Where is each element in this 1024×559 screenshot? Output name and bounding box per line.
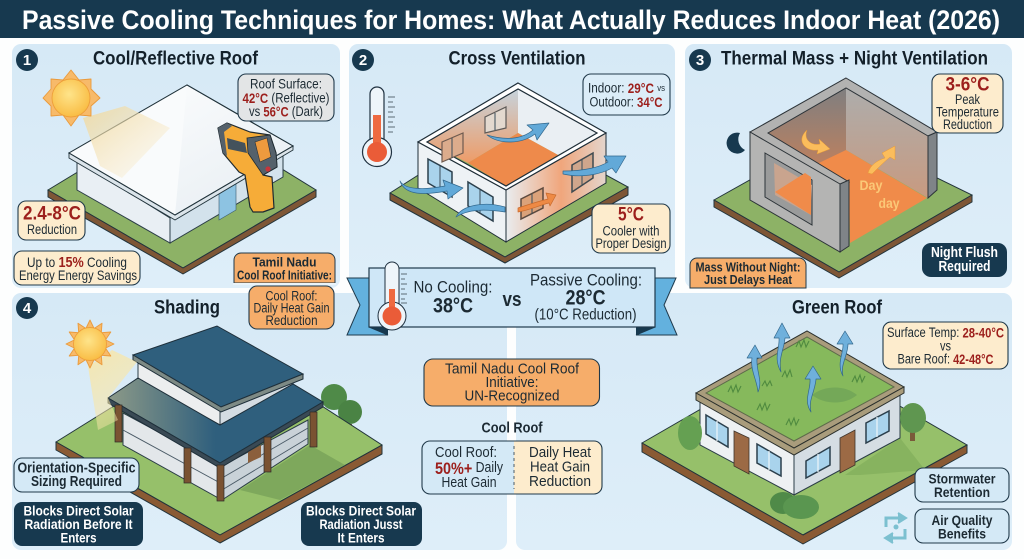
callout: mass without night: Mass Without Night: — [696, 260, 800, 274]
callout: stormwater retention — [915, 468, 1009, 502]
heading: cool roof center: Cool Roof — [482, 420, 543, 436]
heading: cool roof: Cool/Reflective Roof — [93, 48, 259, 70]
callout: blocks direct solar right: It Enters — [338, 530, 385, 546]
callout: 3-6 peak reduction: Temperature — [936, 104, 999, 120]
label: no cooling — [414, 278, 492, 318]
illustration: open room — [390, 83, 628, 263]
panel: shading — [12, 286, 507, 550]
callout: energy savings — [14, 251, 140, 285]
callout: 2.4-8 reduction — [18, 201, 85, 240]
callout: blocks direct solar left — [14, 502, 143, 546]
heading: thermal mass: Thermal Mass + Night Ventilation — [721, 48, 988, 70]
comparison box: cool roof: Heat Gain — [530, 458, 590, 476]
illustration: concrete room — [714, 78, 972, 278]
callout: stormwater retention: Retention — [934, 484, 990, 500]
icon: ribbon thermometer — [378, 262, 407, 330]
number badge 1: 1 — [23, 52, 31, 69]
callout: tamil nadu initiative: Tamil Nadu — [252, 254, 317, 270]
callout: 5 degrees cooler: Cooler with — [602, 224, 660, 238]
panel: cross ventilation — [349, 44, 675, 290]
panel: cool reflective roof — [12, 44, 340, 288]
callout: cool roof daily heat gain: Reduction — [266, 313, 318, 328]
title bar — [0, 0, 1024, 38]
label: day: Day — [860, 177, 883, 193]
comparison ribbon — [347, 262, 677, 335]
number badge 2: 2 — [359, 52, 367, 69]
callout: 3-6 peak reduction — [932, 74, 1003, 133]
icon: sun — [43, 70, 100, 126]
label: no cooling: 38°C — [433, 294, 473, 318]
callout: surface temp: Bare Roof: 42-48°C — [898, 352, 994, 366]
callout: roof surface — [238, 74, 334, 121]
callout: indoor vs outdoor: Outdoor: 34°C — [590, 94, 663, 110]
number badge 3 — [689, 49, 711, 71]
illustration: white roof house — [48, 85, 316, 274]
callout: orientation sizing: Sizing Required — [31, 474, 122, 490]
callout: tamil nadu un-recognized — [424, 359, 600, 406]
callout: cool roof daily heat gain: Cool Roof: — [266, 288, 318, 304]
callout: orientation sizing: Orientation-Specific — [18, 460, 136, 476]
callout: tamil nadu initiative: Cool Roof Initiative: — [237, 268, 332, 282]
panel: thermal mass — [685, 44, 1012, 288]
callout: 2.4-8 reduction: 2.4-8°C — [23, 204, 81, 224]
label: passive cooling: Passive Cooling: — [530, 270, 642, 290]
callout: roof surface: vs 56°C (Dark) — [249, 104, 323, 119]
callout: blocks direct solar left: Blocks Direct Solar — [24, 502, 134, 518]
callout: mass without night: Just Delays Heat — [704, 272, 793, 287]
illustration: tree — [321, 384, 362, 435]
sunlight beam — [83, 106, 170, 178]
callout: surface temp — [883, 322, 1008, 369]
comparison box: cool roof: 50%+ Daily — [435, 458, 504, 478]
callout: air quality: Air Quality — [932, 512, 993, 528]
heading: shading: Shading — [154, 298, 220, 318]
illustration: green roof house — [642, 331, 967, 544]
callout: night flush — [922, 243, 1007, 277]
callout: energy savings: Energy Energy Savings — [19, 267, 137, 283]
icon: thermometer — [362, 87, 395, 166]
icon: moon — [727, 133, 745, 154]
number badge 3: 3 — [696, 52, 704, 69]
callout: tamil nadu initiative — [233, 253, 336, 285]
callout: air quality: Benefits — [938, 526, 986, 542]
arrows: heat movement — [802, 130, 895, 174]
callout: orientation sizing — [14, 458, 139, 492]
callout: air quality — [915, 509, 1009, 543]
callout: surface temp: vs — [940, 338, 951, 354]
comparison box: cool roof: Cool Roof: — [435, 444, 497, 461]
heading: cross ventilation: Cross Ventilation — [448, 48, 586, 70]
heading: green roof: Green Roof — [792, 298, 883, 318]
callout: roof surface: Roof Surface: — [250, 76, 322, 92]
callout: blocks direct solar left: Enters — [60, 530, 97, 546]
number badge 4 — [16, 297, 38, 319]
comparison box: cool roof: Heat Gain — [442, 475, 496, 491]
arrows: evapotranspiration — [747, 323, 853, 412]
label: passive cooling — [530, 270, 642, 324]
callout: tamil nadu un-recognized: Initiative: — [486, 374, 538, 391]
callout: blocks direct solar left: Radiation Before It — [24, 516, 133, 532]
arrows: airflow — [400, 123, 626, 217]
callout: tamil nadu un-recognized: Tamil Nadu Cool Roof — [445, 360, 580, 378]
callout: energy savings: Up to 15% Cooling — [27, 254, 127, 270]
number badge 2 — [352, 49, 374, 71]
callout: mass without night — [690, 258, 806, 288]
callout: night flush: Required — [938, 259, 990, 275]
callout: indoor vs outdoor — [583, 74, 670, 115]
callout: 3-6 peak reduction: Reduction — [943, 117, 992, 132]
comparison box: cool roof: Daily Heat — [529, 444, 592, 461]
number badge 4: 4 — [23, 300, 32, 317]
label: passive cooling: 28°C — [566, 286, 606, 310]
callout: 2.4-8 reduction: Reduction — [27, 222, 77, 237]
illustration: shaded house — [56, 326, 382, 543]
comparison box: cool roof: Reduction — [529, 473, 591, 490]
callout: 3-6 peak reduction: 3-6°C — [946, 74, 990, 96]
callout: blocks direct solar right: Radiation Jusst — [320, 516, 403, 532]
illustration: trees and shrubs — [678, 403, 926, 519]
panel: green roof — [516, 293, 1012, 550]
callout: blocks direct solar right: Blocks Direct Solar — [306, 502, 416, 518]
label: no cooling: No Cooling: — [414, 278, 492, 296]
callout: 5 degrees cooler — [592, 204, 670, 253]
callout: blocks direct solar right — [301, 502, 422, 546]
number badge 1 — [16, 49, 38, 71]
callout: 5 degrees cooler: Proper Design — [596, 236, 666, 251]
callout: surface temp: Surface Temp: 28-40°C — [887, 325, 1004, 340]
callout: stormwater retention: Stormwater — [928, 470, 996, 486]
sunlight beam — [88, 350, 137, 430]
callout: 5 degrees cooler: 5°C — [618, 204, 644, 226]
icon: sun — [66, 320, 114, 368]
icon: infrared thermometer — [218, 123, 277, 212]
label: passive cooling: (10°C Reduction) — [534, 306, 636, 324]
callout: 3-6 peak reduction: Peak — [955, 92, 980, 107]
callout: night flush: Night Flush — [931, 245, 998, 261]
comparison box: cool roof — [422, 441, 602, 494]
label: day lowercase: day — [878, 195, 900, 211]
callout: cool roof daily heat gain — [249, 286, 334, 329]
callout: roof surface: 42°C (Reflective) — [242, 90, 330, 106]
callout: tamil nadu un-recognized: UN-Recognized — [464, 388, 560, 404]
callout: cool roof daily heat gain: Daily Heat Gain — [254, 300, 330, 316]
callout: indoor vs outdoor: Indoor: 29°C vs — [588, 80, 665, 96]
icon: air recycle — [885, 513, 906, 543]
label: vs: vs — [502, 289, 522, 311]
